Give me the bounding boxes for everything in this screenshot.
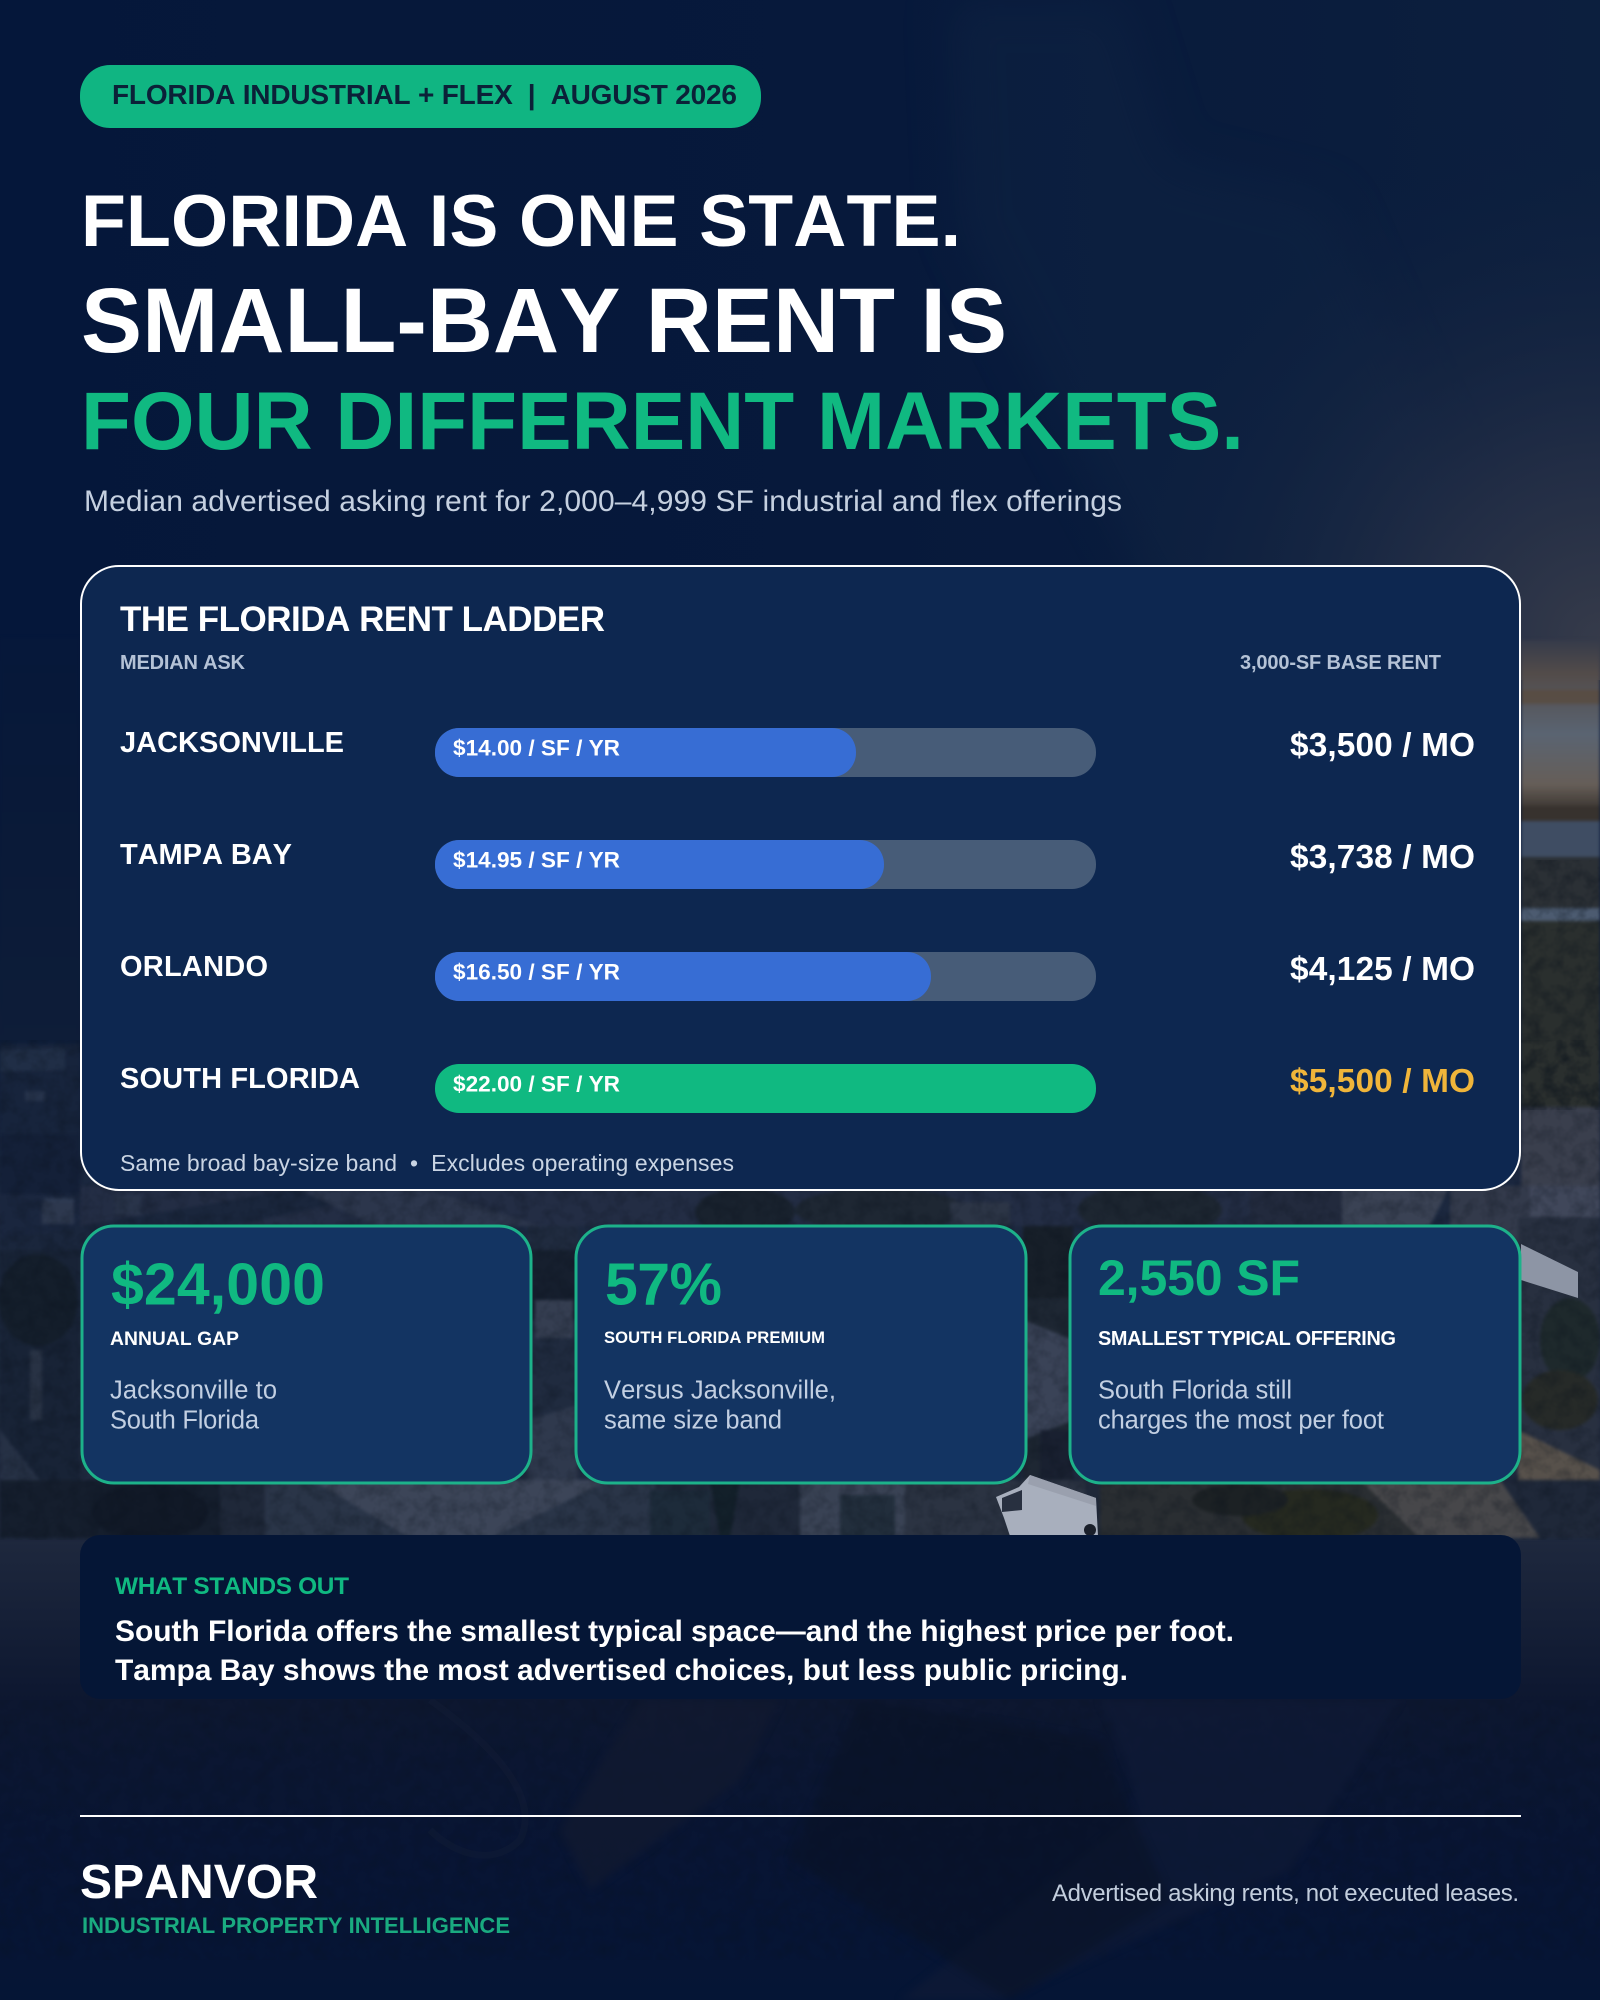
tag pill: FLORIDA INDUSTRIAL + FLEX | AUGUST 2026 [112,79,737,110]
callout: what stands out: WHAT STANDS OUT [115,1573,349,1600]
row: South Florida: $22.00 / SF / YR [453,1072,620,1096]
title: SMALL-BAY RENT IS [81,270,1007,372]
subtitle: Median advertised asking rent for 2,000–4,999 SF industrial and flex offerings [84,485,1122,518]
card: South Florida premium [576,1226,1026,1483]
callout: what stands out: Tampa Bay shows the most advertised choices, but less public pricing. [115,1654,1128,1687]
callout: what stands out: South Florida offers the smallest typical space—and the highest price per foot. [115,1615,1234,1648]
tag pill [80,65,761,128]
row: South Florida: SOUTH FLORIDA [120,1063,360,1095]
row: Orlando: $4,125 / MO [1290,951,1475,988]
callout: what stands out [80,1535,1521,1699]
panel footnote: Same broad bay-size band • Excludes operating expenses [120,1150,734,1176]
card: smallest typical offering: 2,550 SF [1098,1250,1300,1306]
row: Jacksonville: $14.00 / SF / YR [453,736,620,760]
right column below the panel [1518,1217,1600,1537]
lower faded driveway shapes [560,1700,780,1890]
title [81,179,1244,467]
row: Tampa Bay [120,839,1475,889]
footer brand [80,1856,510,1938]
roofs above the cards [80,1186,1300,1226]
band below cards [0,1480,1600,1538]
noise texture over photo [0,1040,1600,1540]
row: Jacksonville: JACKSONVILLE [120,727,344,759]
footer brand: INDUSTRIAL PROPERTY INTELLIGENCE [82,1913,510,1938]
row: Orlando: $16.50 / SF / YR [453,960,620,984]
row: South Florida [120,1063,1475,1113]
gap between cards 1-2 [528,1226,578,1486]
card: annual gap: $24,000 [111,1252,325,1318]
card: annual gap: ANNUAL GAP [110,1329,239,1350]
title: FOUR DIFFERENT MARKETS. [81,376,1244,467]
row: Jacksonville [120,727,1475,777]
column label: base rent: 3,000-SF BASE RENT [1240,652,1441,674]
card: annual gap: South Florida [110,1406,260,1434]
column label: median ask: MEDIAN ASK [120,652,246,674]
card: South Florida premium: 57% [605,1252,722,1318]
row: Tampa Bay: TAMPA BAY [120,839,292,871]
card: South Florida premium: Versus Jacksonville, [604,1376,836,1404]
card: South Florida premium: same size band [604,1406,782,1434]
row: South Florida: $5,500 / MO [1290,1063,1475,1100]
parked van upper right [1521,1244,1578,1298]
row: Orlando: ORLANDO [120,951,268,983]
footer brand: SPANVOR [80,1856,318,1909]
row: Tampa Bay: $14.95 / SF / YR [453,848,620,872]
delivery van [996,1475,1098,1536]
row: Orlando [120,951,1475,1001]
card: annual gap [82,1226,531,1483]
panel heading: THE FLORIDA RENT LADDER [120,600,605,639]
card: annual gap: Jacksonville to [110,1376,277,1404]
left-side palms and buildings [0,1250,80,1535]
footer disclaimer: Advertised asking rents, not executed leases. [1052,1880,1519,1907]
card: smallest typical offering [1070,1226,1520,1483]
panel: the Florida rent ladder [81,566,1520,1190]
row: Tampa Bay: $3,738 / MO [1290,839,1475,876]
card: smallest typical offering: SMALLEST TYPICAL OFFERING [1098,1328,1396,1350]
gap between cards 2-3 [1023,1226,1073,1486]
card: smallest typical offering: South Florida still [1098,1376,1292,1404]
title: FLORIDA IS ONE STATE. [81,179,961,262]
row: Jacksonville: $3,500 / MO [1290,727,1475,764]
card: smallest typical offering: charges the most per foot [1098,1406,1384,1434]
card: South Florida premium: SOUTH FLORIDA PREMIUM [604,1328,825,1347]
